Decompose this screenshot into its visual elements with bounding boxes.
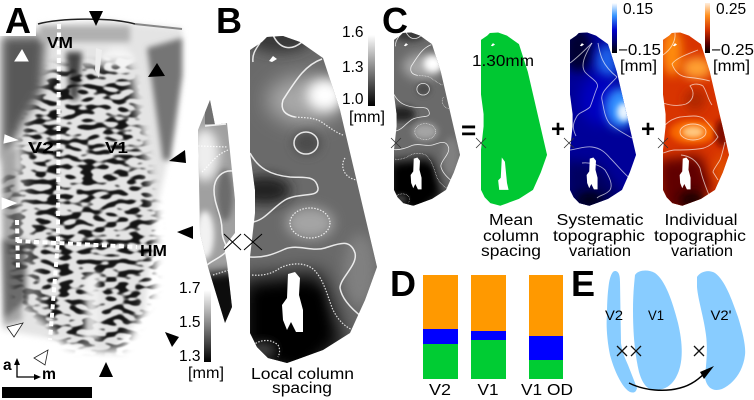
panel C: gray total map bbox=[390, 32, 460, 206]
crosses bbox=[617, 346, 704, 356]
colorbar: blue: 0.15 bbox=[623, 1, 653, 18]
bar V2 bbox=[423, 275, 458, 399]
panel A: cortical map photograph bbox=[0, 0, 193, 398]
label V1: V1 bbox=[105, 140, 128, 157]
vertical meridian dotted line bbox=[50, 24, 59, 340]
outlined border arrowheads bbox=[7, 323, 48, 365]
pale central streak bbox=[84, 272, 100, 340]
caption: mean column spacing: column bbox=[483, 228, 539, 245]
colorbar: B top: 1.3 bbox=[342, 59, 364, 76]
region V1 bbox=[633, 271, 682, 390]
caption: systematic topographic variation: Systematic bbox=[556, 212, 644, 229]
colorbar: B bottom bbox=[179, 280, 224, 382]
panel C: blue systematic variation map bbox=[564, 32, 636, 206]
heading D: D bbox=[390, 263, 416, 304]
caption: systematic topographic variation: topographic bbox=[553, 228, 645, 245]
colorbar: B top: [mm] bbox=[349, 109, 385, 126]
bar V1 OD: V1 OD bbox=[521, 382, 573, 399]
bar V1 bbox=[471, 275, 506, 399]
colorbar: orange: 0.25 bbox=[716, 1, 746, 18]
panel E: schematic of V2 V1 V2' bbox=[605, 271, 745, 393]
colorbar: orange bbox=[705, 1, 754, 75]
region V2 bbox=[607, 271, 637, 393]
label V2: V2 bbox=[605, 307, 623, 323]
plus sign: + bbox=[641, 116, 655, 143]
bar V1 OD bbox=[521, 275, 573, 399]
equals sign: = bbox=[461, 115, 476, 145]
caption: systematic topographic variation: variation bbox=[569, 243, 631, 260]
caption: individual topographic variation: topographic bbox=[654, 228, 746, 245]
caption: mean column spacing: spacing bbox=[481, 243, 541, 260]
caption: local column spacing: spacing bbox=[272, 380, 332, 397]
heading C: C bbox=[382, 0, 408, 41]
colorbar: B top bbox=[342, 24, 385, 126]
colorbar: B top: 1.0 bbox=[342, 91, 364, 108]
curved arrow bbox=[629, 366, 714, 390]
label V2: V2 bbox=[28, 140, 54, 157]
caption: mean column spacing bbox=[481, 212, 541, 260]
colorbar: blue: −0.15 bbox=[618, 42, 661, 59]
black border arrowheads bbox=[89, 11, 193, 377]
caption: individual topographic variation: Individual bbox=[664, 212, 738, 229]
heading E: E bbox=[571, 263, 595, 304]
caption: local column spacing: Local column bbox=[251, 366, 354, 383]
region V2 prime bbox=[697, 271, 745, 390]
heading A: A bbox=[5, 0, 31, 41]
colorbar: B bottom: 1.7 bbox=[179, 280, 201, 297]
bar V1: V1 bbox=[478, 382, 498, 399]
caption: local column spacing bbox=[251, 366, 354, 397]
ocular dominance stripes bbox=[0, 57, 163, 356]
V2 strip map bbox=[198, 100, 235, 323]
axis arrows: m bbox=[42, 366, 56, 383]
panel B: local column spacing maps bbox=[198, 36, 377, 363]
panel C: green mean map: 1.30mm bbox=[472, 53, 534, 70]
colorbar: B bottom: [mm] bbox=[188, 365, 224, 382]
plus sign: + bbox=[551, 116, 565, 143]
scale bar bbox=[2, 387, 92, 398]
label VM: VM bbox=[47, 35, 73, 52]
colorbar: B top: 1.6 bbox=[342, 24, 364, 41]
caption: individual topographic variation: variation bbox=[671, 243, 733, 260]
label V1: V1 bbox=[648, 307, 664, 323]
caption: individual topographic variation bbox=[654, 212, 746, 260]
heading B: B bbox=[216, 0, 242, 41]
white border arrowheads bbox=[2, 50, 28, 209]
bar V2: V2 bbox=[429, 382, 451, 399]
horizontal meridian dotted line bbox=[17, 241, 137, 247]
tissue background bbox=[2, 19, 182, 355]
label V2': V2' bbox=[710, 307, 732, 323]
panel D: stacked bars bbox=[423, 275, 573, 399]
left dotted line bbox=[17, 220, 18, 270]
panel C: orange individual variation map bbox=[658, 32, 729, 206]
white corner behind label bbox=[0, 0, 36, 36]
colorbar: B bottom: 1.5 bbox=[179, 314, 201, 331]
label HM: HM bbox=[140, 243, 167, 260]
V1 large map bbox=[250, 36, 377, 363]
colorbar: blue bbox=[612, 1, 661, 75]
caption: mean column spacing: Mean bbox=[489, 212, 533, 229]
panel C: green mean map bbox=[472, 32, 547, 206]
colorbar: orange: −0.25 bbox=[711, 42, 754, 59]
axis arrows: a bbox=[3, 357, 12, 374]
pale slit bbox=[95, 48, 102, 78]
axis arrows bbox=[3, 357, 56, 383]
colorbar: orange: [mm] bbox=[713, 58, 750, 75]
crosses bbox=[224, 234, 262, 250]
caption: systematic topographic variation bbox=[553, 212, 645, 260]
colorbar: B bottom: 1.3 bbox=[179, 348, 201, 365]
colorbar: blue: [mm] bbox=[620, 58, 657, 75]
